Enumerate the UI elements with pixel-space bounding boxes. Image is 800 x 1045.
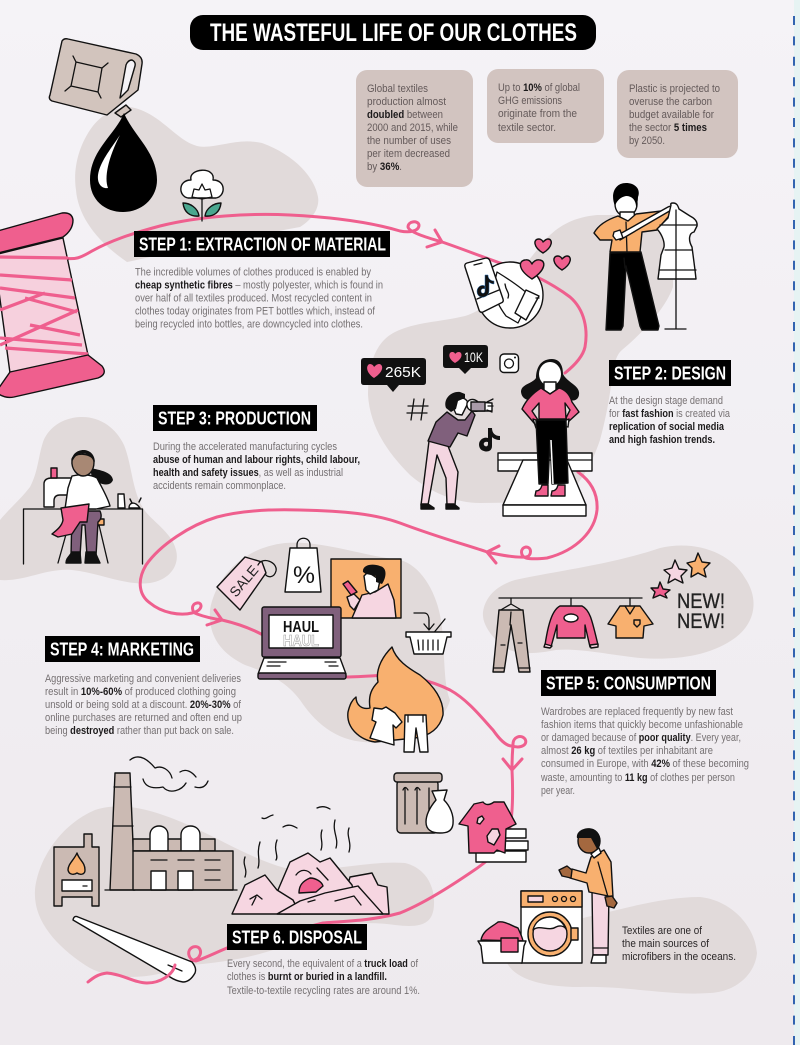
stat box: textile production: doubled between [367, 109, 443, 121]
icon: factory [105, 757, 237, 890]
stat box: textile production [356, 70, 473, 187]
figure: model [521, 359, 579, 496]
icon: torn t-shirt and stacked clothes [459, 802, 528, 862]
step 5 text: fashion items that quickly become unfashionable [541, 719, 743, 731]
icon: landfill [232, 807, 389, 914]
stat box: carbon budget: by 2050. [629, 135, 665, 147]
figure: man at washing machine [559, 828, 617, 963]
icon: oil drop [90, 113, 157, 212]
marketing: person with phone [331, 559, 401, 618]
step 5 text: or damaged because of poor quality. Every year, [541, 732, 741, 744]
sewing thread path [62, 214, 597, 965]
step 2 text [609, 395, 730, 446]
clothes rack with garments [493, 598, 653, 672]
step 3 text: health and safety issues, as well as industrial [153, 467, 343, 479]
stat box: textile production: 2000 and 2015, while [367, 122, 458, 134]
step 5 text: waste, amounting to 11 kg of clothes per person [540, 772, 735, 784]
step 3 heading [153, 405, 317, 431]
microfiber note: microfibers in the oceans. [622, 951, 736, 963]
marketing: laptop HAUL: HAUL [283, 633, 319, 650]
stat box: textile production: production almost [367, 96, 446, 108]
step 1 heading [134, 231, 390, 257]
icon: burning clothes flame [348, 647, 443, 752]
icon: laundry basket [478, 922, 526, 963]
step 6 text: Every second, the equivalent of a truck load of [227, 958, 418, 970]
like bubble: 265K: 265K [385, 364, 421, 381]
step 4 text: Aggressive marketing and convenient deliveries [45, 673, 241, 685]
step 5 text: almost 26 kg of textiles per inhabitant are [541, 745, 713, 757]
step 6 heading: STEP 6. DISPOSAL [232, 928, 362, 948]
stat box: GHG emissions: originate from the [498, 108, 577, 120]
stat box: GHG emissions [487, 69, 604, 143]
stat box: textile production: per item decreased [367, 148, 450, 160]
stat box: textile production: the number of uses [367, 135, 451, 147]
marketing: laptop HAUL [258, 607, 346, 679]
icon: trash can and bag [394, 773, 453, 833]
like bubble: 10K [443, 345, 488, 374]
icon: jerry can [49, 39, 142, 117]
new new text: NEW! [677, 590, 725, 613]
step 4 heading [45, 636, 200, 662]
step 5 text: Wardrobes are replaced frequently by new fast [541, 706, 733, 718]
icon: furnace [54, 834, 99, 906]
marketing: shopping bag: % [293, 562, 315, 589]
title: THE WASTEFUL LIFE OF OUR CLOTHES [210, 19, 577, 47]
step 4 text [45, 673, 242, 737]
step 3 text: abuse of human and labour rights, child labour, [153, 454, 360, 466]
step 6 text: clothes is burnt or buried in a landfill. [227, 971, 387, 983]
step 6 text [227, 958, 420, 997]
stat box: carbon budget [617, 70, 738, 158]
icon: shopping basket [406, 613, 451, 654]
icon: tiktok note [479, 428, 500, 451]
stat box: carbon budget: Plastic is projected to [629, 83, 720, 95]
like bubble: 10K: 10K [464, 349, 483, 365]
icon: instagram [500, 354, 518, 372]
title [190, 15, 596, 50]
stat box: carbon budget: overuse the carbon [629, 96, 712, 108]
microfiber note: Textiles are one of [622, 925, 702, 937]
step 1 text: cheap synthetic fibres – mostly polyester, which is found in [135, 280, 383, 292]
runway platform [498, 453, 592, 516]
step 4 text: result in 10%-60% of produced clothing going [45, 686, 236, 698]
stat box: carbon budget: budget available for [629, 109, 714, 121]
microfiber note: the main sources of [622, 938, 709, 950]
step 5 text: consumed in Europe, with 42% of these becoming [541, 758, 749, 770]
step 2 heading: STEP 2: DESIGN [614, 364, 726, 384]
step 3 text: During the accelerated manufacturing cycles [153, 441, 337, 453]
stat box: GHG emissions: Up to 10% of global [498, 82, 580, 94]
figure: photographer [421, 392, 493, 509]
step 4 text: being destroyed rather than put back on sale. [45, 725, 234, 737]
step 4 heading: STEP 4: MARKETING [50, 640, 194, 660]
step 3 heading: STEP 3: PRODUCTION [158, 408, 311, 428]
step 2 heading [609, 360, 731, 386]
step 4 text: unsold or being sold at a discount. 20%-30% of [45, 699, 241, 711]
stat box: GHG emissions: GHG emissions [498, 95, 562, 107]
step 5 text [540, 706, 749, 797]
stat box: textile production: Global textiles [367, 83, 428, 95]
step 1 heading: STEP 1: EXTRACTION OF MATERIAL [139, 234, 386, 254]
stat box: GHG emissions: textile sector. [498, 122, 556, 134]
step 6 heading [227, 924, 367, 950]
step 6 text: Textile-to-textile recycling rates are around 1%. [227, 985, 420, 997]
step 1 text: over half of all textiles produced. Most recycled content in [135, 292, 372, 304]
stat box: textile production: by 36%. [367, 161, 402, 173]
icon: washing machine [521, 891, 582, 963]
icon: cotton plant [181, 170, 223, 221]
step 5 heading: STEP 5: CONSUMPTION [546, 674, 711, 694]
step 5 heading [541, 670, 716, 696]
step 3 text: accidents remain commonplace. [153, 480, 286, 492]
like bubble: 265K [361, 358, 426, 392]
marketing: shopping bag [285, 538, 321, 592]
marketing: sale tag: SALE [226, 562, 261, 600]
step 1 text [135, 266, 383, 330]
new new text: NEW! [677, 610, 725, 633]
stat box: carbon budget: the sector 5 times [629, 122, 707, 134]
step 2 text: for fast fashion is created via [609, 408, 730, 420]
icon: hashtag [407, 399, 428, 420]
marketing: sale tag [217, 557, 276, 610]
marketing: laptop HAUL: HAUL [283, 619, 319, 636]
figure: seamstress at sewing machine [24, 450, 142, 564]
step 5 text: per year. [541, 785, 575, 797]
step 1 text: The incredible volumes of clothes produced is enabled by [135, 266, 372, 278]
microfiber note [622, 925, 736, 963]
step 1 text: being recycled into bottles, are downcycled into clothes. [135, 318, 363, 330]
step 4 text: online purchases are returned and often end up [45, 712, 242, 724]
icon: thread spool [0, 213, 104, 397]
icons: stars [651, 553, 710, 598]
step 1 text: clothes today originates from PET bottles which, instead of [135, 306, 375, 318]
step 2 text: replication of social media [609, 421, 724, 433]
step 2 text: At the design stage demand [609, 395, 723, 407]
figure: designer with mannequin [594, 183, 697, 330]
step 3 text [153, 441, 360, 492]
icon: hand holding phone with hearts [465, 239, 570, 328]
step 2 text: and high fashion trends. [609, 434, 715, 446]
icon: needle [73, 916, 196, 983]
new new text [677, 590, 725, 633]
